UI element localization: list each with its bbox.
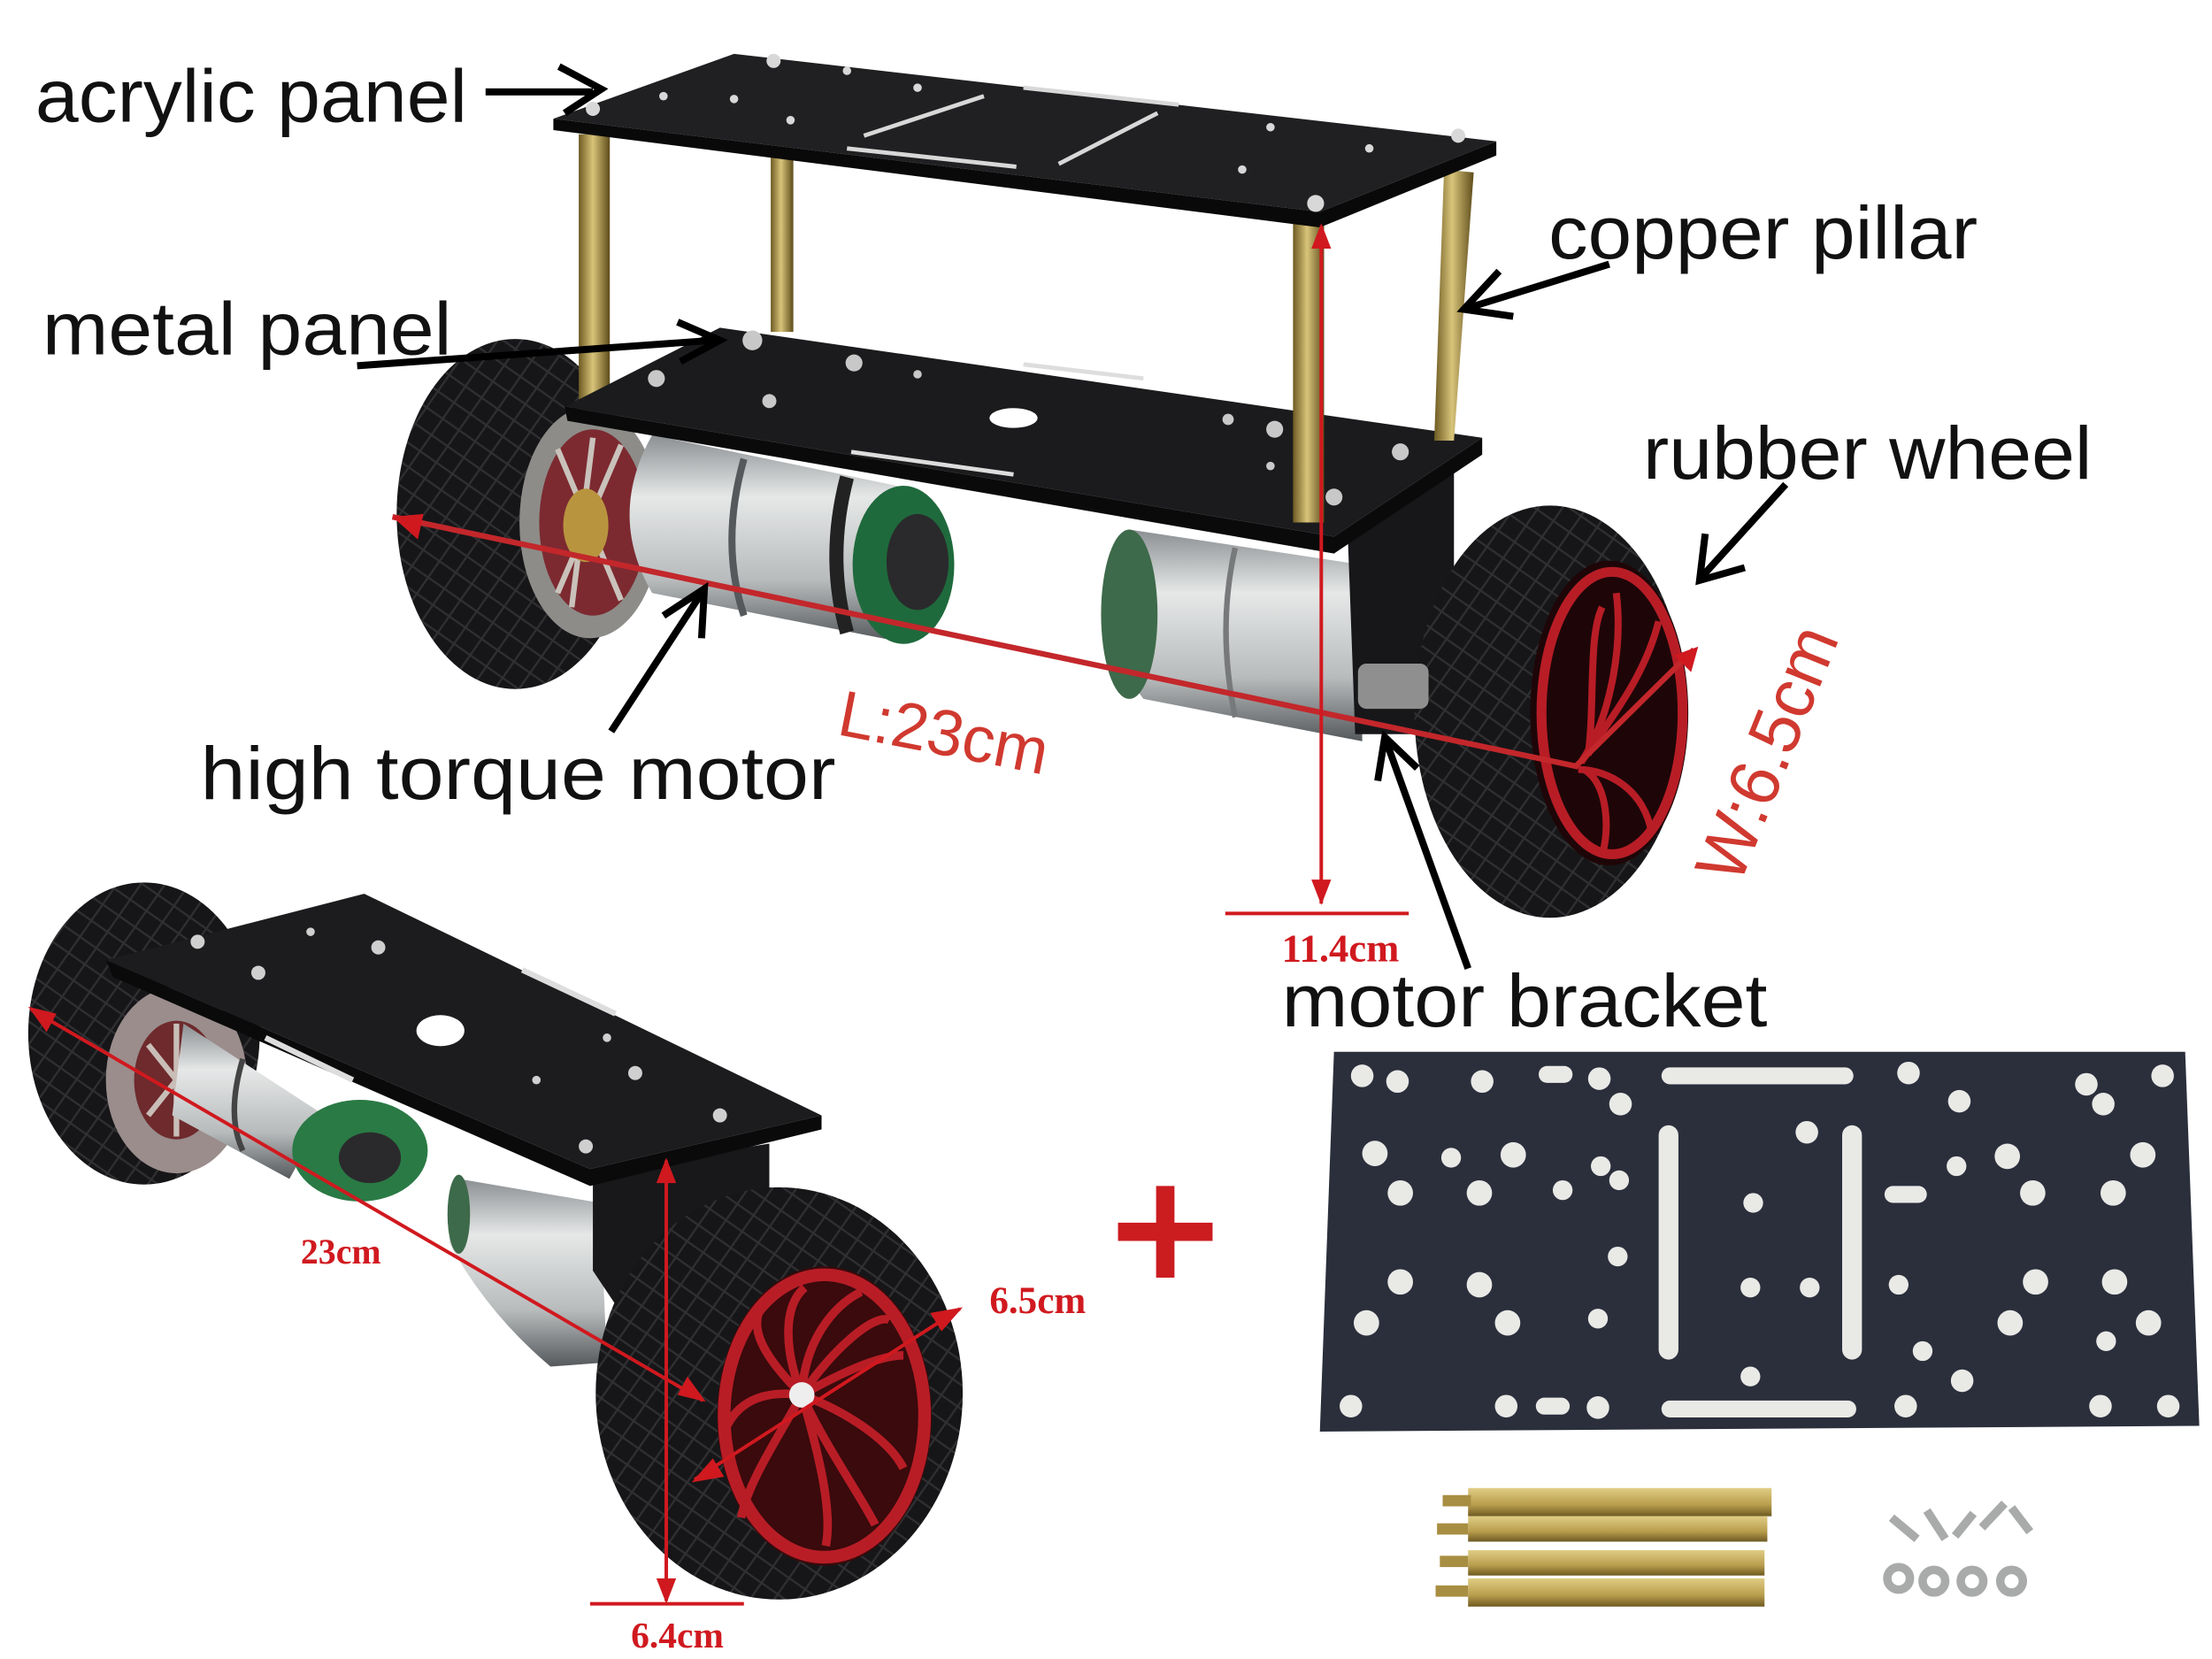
label: copper pillar: copper pillar [1548, 190, 1978, 274]
front pillars [1293, 170, 1474, 522]
dimension: L 23cm: L:23cm [833, 677, 1055, 788]
dimension: 23cm lower [28, 1007, 706, 1402]
motor bracket [1348, 473, 1454, 734]
motors [173, 1024, 607, 1367]
label: high torque motor [201, 588, 835, 815]
dimension: height 11.4cm: 11.4cm [1282, 926, 1399, 971]
dimension: 23cm lower: 23cm [301, 1232, 381, 1271]
rear wheel [28, 882, 260, 1185]
label: rubber wheel: rubber wheel [1643, 411, 2092, 495]
shaft [1358, 664, 1429, 709]
dimension: 6.4cm lower: 6.4cm [631, 1615, 724, 1655]
acrylic panel flat view [1320, 1052, 2200, 1432]
label: copper pillar [1463, 190, 1978, 317]
label: rubber wheel [1643, 411, 2092, 580]
dimension: W 6.5cm: W:6.5cm [1680, 614, 1854, 892]
bottom-left robot chassis [28, 882, 963, 1600]
dimension: 6.5cm lower: 6.5cm [989, 1280, 1086, 1322]
acrylic panel [553, 54, 1496, 227]
motor, right [1101, 529, 1363, 741]
top robot chassis [396, 54, 1688, 918]
motor, left [630, 435, 954, 644]
label: metal panel: metal panel [42, 287, 452, 371]
motor bracket [593, 1143, 769, 1313]
right wheel, top robot [1415, 505, 1688, 918]
label: high torque motor: high torque motor [201, 731, 835, 815]
dimension: height 11.4cm [1225, 223, 1409, 971]
dimension: 6.5cm lower [692, 1280, 1086, 1482]
dimension: L 23cm [393, 514, 1578, 788]
label: metal panel [42, 287, 720, 371]
plus sign [1118, 1186, 1212, 1278]
label: acrylic panel: acrylic panel [35, 53, 467, 137]
label: motor bracket [1282, 737, 1767, 1042]
dimension: 6.4cm lower [590, 1157, 744, 1655]
front wheel [595, 1187, 963, 1600]
screws and nuts [1887, 1503, 2030, 1593]
dimension: W 6.5cm [1575, 614, 1854, 892]
left wheel, top robot [396, 339, 661, 689]
chassis plate [106, 894, 822, 1186]
brass standoffs [1436, 1488, 1771, 1607]
rear pillars [579, 134, 794, 410]
label: motor bracket: motor bracket [1282, 958, 1767, 1042]
metal panel [565, 327, 1482, 554]
